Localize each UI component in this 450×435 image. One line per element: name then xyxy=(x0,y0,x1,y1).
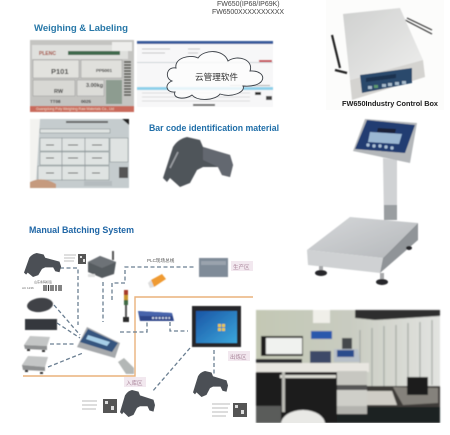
heading: Manual Batching System: Manual Batching System xyxy=(29,225,134,235)
PLC bus label: PLC现场总线 xyxy=(147,257,175,264)
weight xyxy=(407,377,428,395)
USB drive xyxy=(148,274,166,288)
zone tag: smelting xyxy=(228,351,250,361)
scanner: bottom xyxy=(120,390,155,417)
indicator face xyxy=(355,120,415,153)
photo: material label: P101 xyxy=(51,67,69,76)
platform top xyxy=(307,217,418,258)
photo: batching sheet xyxy=(30,119,129,188)
zone tag: warehouse xyxy=(124,377,146,387)
photo: material label: 0025 xyxy=(81,99,92,104)
diagram: manual batching system xyxy=(22,251,253,417)
control panel xyxy=(360,68,412,93)
connection lines xyxy=(48,267,214,392)
platform front xyxy=(307,250,383,273)
photo: material label: TT08 xyxy=(50,99,61,104)
zone tag: smelting: 出炼区 xyxy=(230,353,247,361)
desk underside xyxy=(256,372,337,423)
chair xyxy=(256,406,281,423)
box top xyxy=(343,8,423,80)
foot switch xyxy=(118,358,134,374)
photo: FW650 industry control box xyxy=(326,0,444,110)
zone tag: production xyxy=(231,261,253,271)
photo: material label: PLENC xyxy=(39,51,56,57)
zone tag: warehouse: 入库区 xyxy=(126,379,143,387)
platform scale: lower xyxy=(22,356,48,374)
model number text: FW6500XXXXXXXXXX xyxy=(212,9,284,16)
barcode label: AC 1236 xyxy=(22,286,34,290)
heading: Weighing & Labeling: Weighing & Labeling xyxy=(34,23,128,34)
platform scale: upper xyxy=(24,336,50,352)
heading: Bar code identification material: Bar code identification material xyxy=(149,123,279,133)
photo: material label: RW xyxy=(54,89,64,95)
scanner: right xyxy=(193,371,228,397)
drawers xyxy=(337,371,367,385)
photo: material label: 3.00kg xyxy=(86,83,103,89)
cloud outline xyxy=(167,52,263,99)
model number text xyxy=(212,1,284,16)
label printer xyxy=(88,251,116,278)
cloud label: 云管理软件 xyxy=(195,71,238,82)
scale column xyxy=(383,158,397,220)
monitor xyxy=(261,336,303,356)
network switch xyxy=(138,311,174,321)
zone tag: production: 生产区 xyxy=(233,263,250,271)
QR code: bottom left xyxy=(82,399,117,413)
cables xyxy=(405,18,432,34)
weighing indicator xyxy=(77,327,120,358)
photo: material label: PP5001 xyxy=(96,68,113,73)
screenshot: cloud management software xyxy=(137,41,273,107)
floor xyxy=(367,405,440,423)
stack light xyxy=(123,290,129,322)
printer on desk xyxy=(310,351,331,365)
photo: bench scale with indicator xyxy=(307,119,418,285)
model number text: FW650(IP68/IP69K) xyxy=(217,1,280,8)
indicator back xyxy=(353,119,417,163)
zone border xyxy=(23,297,253,376)
panel PC xyxy=(192,306,241,347)
keyboard xyxy=(25,319,57,330)
barcode label: 山东条码标签 xyxy=(34,279,52,284)
mouse xyxy=(26,297,54,313)
indicator on desk xyxy=(334,349,360,362)
photo: material label: Guangdong Poly Weighing Raw Materials Co., Ltd xyxy=(36,107,114,111)
scale feet xyxy=(319,266,384,280)
desk top xyxy=(256,363,369,372)
photo: workstation installation xyxy=(250,310,450,435)
QR code: top xyxy=(64,254,86,264)
corrugated wall xyxy=(360,320,432,388)
caption: control box: FW650Industry Control Box xyxy=(342,99,439,108)
scanner: top left xyxy=(24,253,61,277)
barcode label xyxy=(22,279,61,291)
QR code: bottom right xyxy=(212,403,247,417)
icon: barcode scanner xyxy=(163,137,233,187)
photo: material label xyxy=(30,40,134,112)
PLC module xyxy=(199,258,228,277)
box front xyxy=(350,60,425,100)
antenna xyxy=(332,35,347,73)
